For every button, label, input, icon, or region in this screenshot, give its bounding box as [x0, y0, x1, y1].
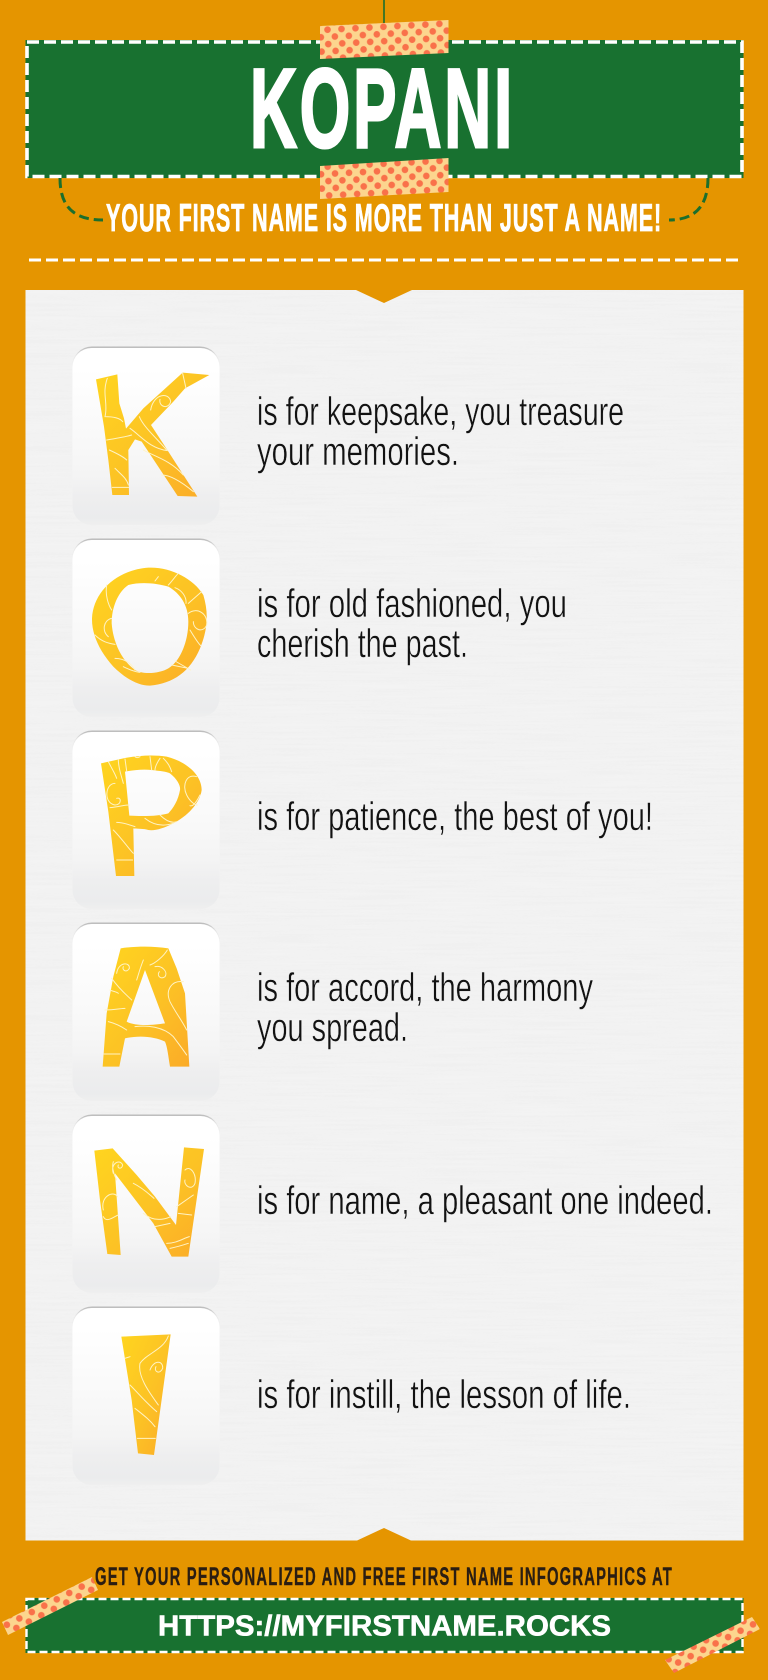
- dashed curve right: [669, 178, 708, 220]
- title banner: [26, 40, 744, 178]
- text: K: [257, 390, 624, 474]
- icon: I tile: [72, 1306, 220, 1485]
- icon: O tile: [72, 538, 220, 717]
- text: K: your memories.: [257, 430, 459, 474]
- tape: top: [320, 20, 448, 59]
- icon: N tile: [72, 1114, 220, 1293]
- row: P: [72, 730, 653, 909]
- text: A: [257, 966, 593, 1050]
- icon: P tile: [72, 730, 220, 909]
- title: name: KOPANI: [250, 46, 515, 171]
- text: O: is for old fashioned, you: [257, 582, 567, 626]
- text: K: is for keepsake, you treasure: [257, 390, 624, 434]
- icon: K tile: [72, 346, 220, 525]
- text: A: is for accord, the harmony: [257, 966, 593, 1010]
- row: O: [72, 538, 567, 717]
- text: A: you spread.: [257, 1006, 408, 1050]
- panel: letters: [26, 290, 744, 1541]
- dashed curve left: [60, 178, 103, 220]
- text: O: cherish the past.: [257, 622, 468, 666]
- tape: footer left: [2, 1577, 98, 1635]
- row: K: [72, 346, 624, 525]
- text: O: [257, 582, 567, 666]
- URL banner: [26, 1598, 744, 1653]
- row: A: [72, 922, 593, 1101]
- row: I: [72, 1306, 631, 1485]
- tape: footer right: [665, 1617, 760, 1673]
- row: N: [72, 1114, 713, 1293]
- icon: A tile: [72, 922, 220, 1101]
- text: I: is for instill, the lesson of life.: [257, 1373, 631, 1417]
- hanging green thread: [383, 0, 385, 25]
- URL: HTTPS://MYFIRSTNAME.ROCKS: [158, 1610, 611, 1642]
- tape: bottom of title: [320, 158, 448, 199]
